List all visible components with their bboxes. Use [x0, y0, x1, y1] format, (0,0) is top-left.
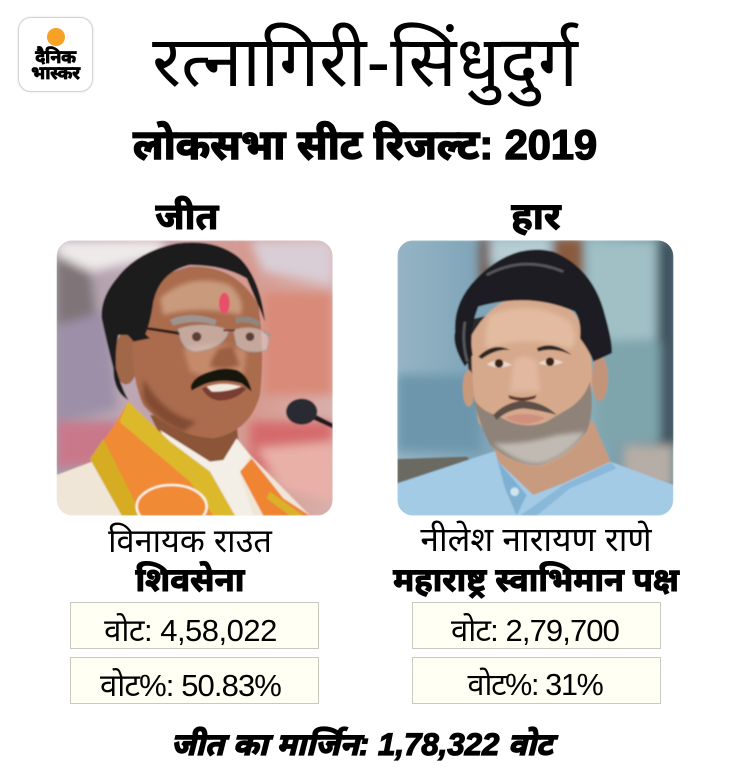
vote share box: right: [412, 657, 661, 704]
logo wordmark: दैनिक: [35, 47, 76, 67]
votes box: right: वोट: 2,79,700: [451, 613, 619, 648]
sofa: [397, 456, 470, 484]
collar: [498, 460, 527, 515]
votes box: right: [412, 602, 661, 649]
vote share box: left: वोट%: 50.83%: [100, 668, 281, 703]
logo wordmark: भास्कर: [31, 63, 80, 83]
votes box: left: [70, 602, 319, 649]
eyebrows: [478, 347, 510, 359]
face: [133, 267, 262, 438]
neck: [485, 422, 611, 495]
heading: loss: हार: [511, 196, 561, 238]
logo: Dainik Bhaskar: [18, 17, 93, 92]
photo: winner Vinayak Raut: [56, 240, 333, 516]
eyes: [487, 361, 512, 367]
side hair: [466, 316, 486, 374]
vote share box: right: वोट%: 31%: [468, 668, 602, 702]
face: [470, 299, 592, 428]
suit: [56, 454, 309, 516]
photo: runner-up Nilesh Rane: [397, 240, 674, 516]
subtitle: लोकसभा सीट रिजल्ट: 2019: [133, 121, 597, 168]
ears: [463, 370, 475, 407]
shirt: [397, 452, 673, 516]
orange stole right: [240, 458, 310, 516]
logo wordmark: [31, 46, 81, 83]
hair: [102, 242, 265, 400]
neck: [150, 415, 240, 468]
eyebrows: [170, 315, 217, 326]
nose: [508, 395, 537, 401]
mouth: [202, 384, 247, 401]
party: right: महाराष्ट्र स्वाभिमान पक्ष: [393, 562, 679, 598]
party: left: शिवसेना: [135, 561, 245, 598]
winning margin: जीत का मार्जिन: 1,78,322 वोट: [171, 727, 553, 762]
votes box: left: वोट: 4,58,022: [104, 613, 277, 648]
logo sun: [47, 28, 65, 46]
glasses: [178, 325, 228, 352]
candidate name: right: नीलेश नारायण राणे: [420, 522, 652, 559]
moustache: [493, 401, 557, 420]
beard: [473, 382, 592, 465]
microphone: [313, 414, 333, 429]
moustache: [191, 369, 252, 392]
collar: [160, 430, 253, 516]
bindi: [219, 293, 230, 314]
candidate name: left: विनायक राउत: [108, 523, 272, 559]
nose shadow: [210, 345, 240, 369]
hair: [454, 250, 612, 367]
ear: [114, 334, 136, 385]
lips: [505, 414, 545, 424]
heading: win: जीत: [156, 196, 218, 237]
vote share box: left: [70, 657, 319, 704]
orange stole left: [90, 402, 235, 516]
title: रत्नागिरी-सिंधुदुर्ग: [152, 23, 578, 102]
